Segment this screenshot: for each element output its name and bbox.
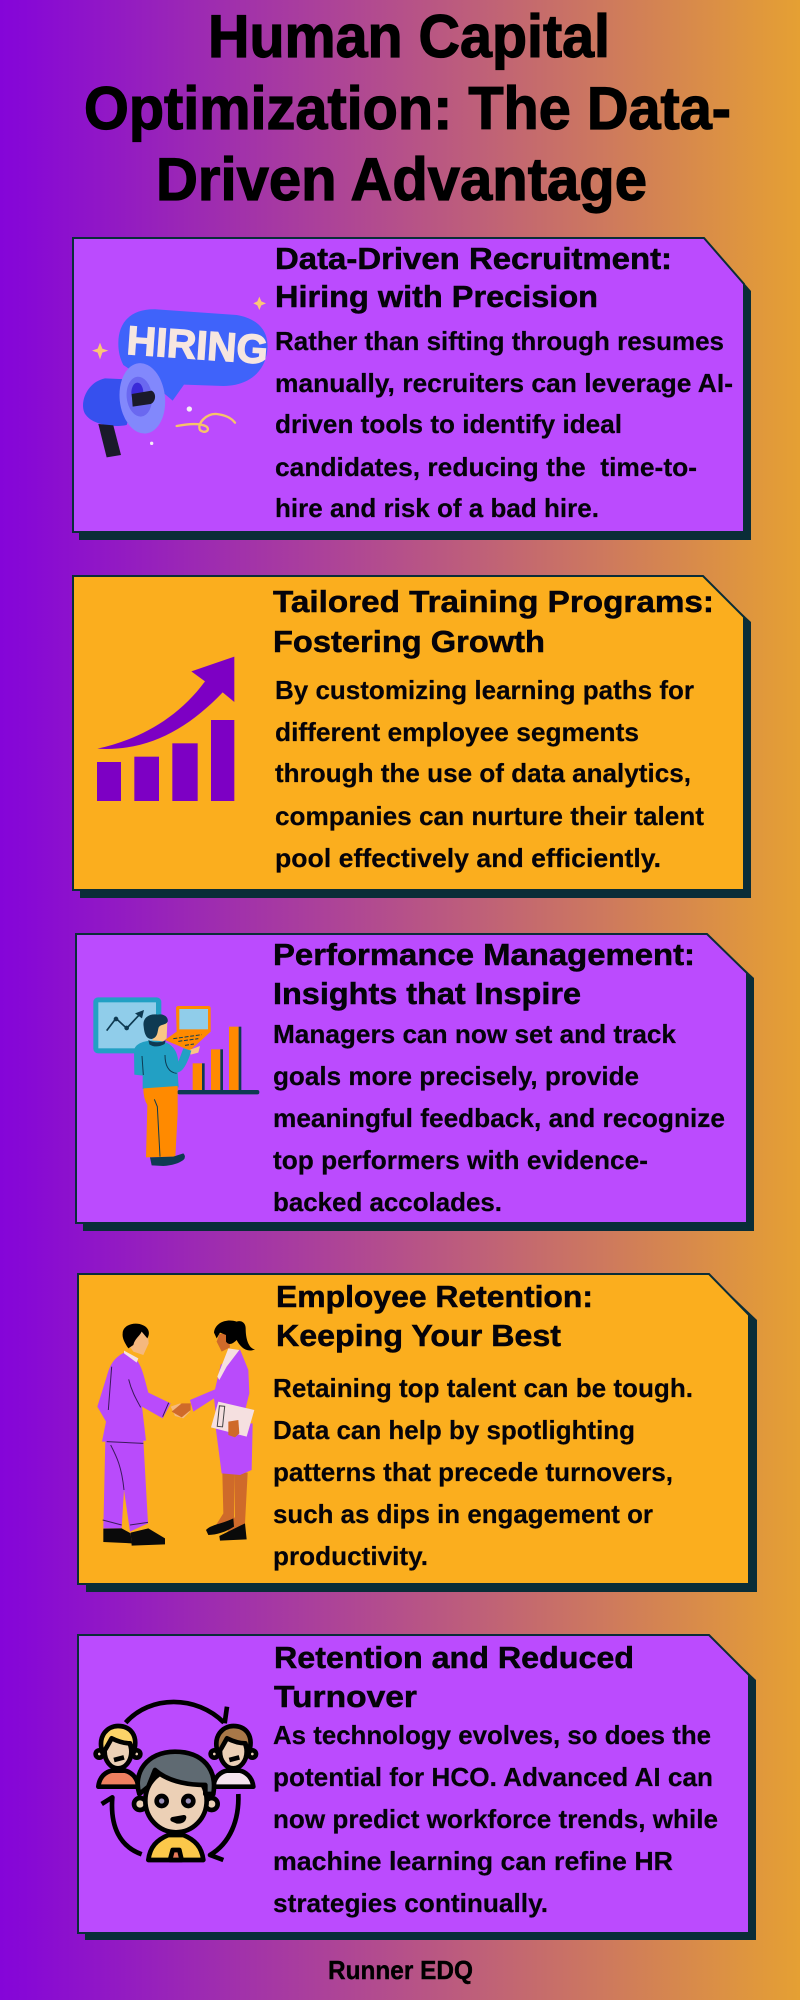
- heading: [275, 242, 672, 314]
- body text: potential for HCO. Advanced AI can: [273, 1762, 713, 1792]
- heading: Retention and Reduced: [274, 1641, 634, 1675]
- body text: hire and risk of a bad hire.: [275, 493, 599, 523]
- icon: team rotation: [96, 1702, 256, 1860]
- card 4 background: [78, 1274, 757, 1592]
- heading: [273, 938, 695, 1011]
- body text: such as dips in engagement or: [273, 1499, 653, 1529]
- heading: [276, 1280, 593, 1353]
- panel: employee retention: [78, 1274, 757, 1592]
- title: [84, 3, 731, 213]
- body text: By customizing learning paths for: [275, 675, 694, 705]
- heading: [273, 585, 714, 659]
- icon: analyst with laptop: [93, 997, 259, 1166]
- body text: [273, 1019, 725, 1217]
- body text: candidates, reducing the time-to-: [275, 452, 697, 482]
- heading: [274, 1641, 634, 1714]
- card 1 background: [73, 238, 751, 540]
- body text: As technology evolves, so does the: [273, 1720, 711, 1750]
- body text: patterns that precede turnovers,: [273, 1457, 673, 1487]
- panel: retention and reduced turnover: [78, 1635, 756, 1940]
- card 2 background: [73, 576, 751, 898]
- body text: [275, 326, 733, 523]
- body text: meaningful feedback, and recognize: [273, 1103, 725, 1133]
- heading: Employee Retention:: [276, 1280, 593, 1314]
- body text: [273, 1373, 693, 1571]
- body text: backed accolades.: [273, 1187, 502, 1217]
- body text: through the use of data analytics,: [275, 758, 691, 788]
- body text: now predict workforce trends, while: [273, 1804, 718, 1834]
- body text: [275, 675, 704, 873]
- icon: hiring megaphone: HIRING: [125, 317, 270, 373]
- body text: [273, 1720, 718, 1918]
- body text: Managers can now set and track: [273, 1019, 677, 1049]
- body text: machine learning can refine HR: [273, 1846, 673, 1876]
- icon: hiring megaphone: [83, 297, 270, 457]
- heading: Tailored Training Programs:: [273, 585, 714, 619]
- heading: Data-Driven Recruitment:: [275, 242, 672, 276]
- body text: goals more precisely, provide: [273, 1061, 639, 1091]
- body text: manually, recruiters can leverage AI-: [275, 368, 733, 398]
- panel: data-driven recruitment: [73, 238, 751, 540]
- body text: different employee segments: [275, 717, 639, 747]
- title: Optimization: The Data-: [84, 75, 731, 142]
- footer credit: Runner EDQ: [328, 1955, 473, 1985]
- body text: Rather than sifting through resumes: [275, 326, 724, 356]
- icon: handshake: [97, 1321, 255, 1546]
- title: Human Capital: [208, 3, 610, 70]
- heading: Keeping Your Best: [276, 1319, 561, 1353]
- panel: performance management: [76, 934, 754, 1231]
- body text: Data can help by spotlighting: [273, 1415, 635, 1445]
- body text: top performers with evidence-: [273, 1145, 648, 1175]
- panel: tailored training programs: [73, 576, 751, 898]
- icon: growth chart: [97, 657, 234, 801]
- body text: pool effectively and efficiently.: [275, 843, 661, 873]
- body text: productivity.: [273, 1541, 428, 1571]
- card 3 background: [76, 934, 754, 1231]
- body text: companies can nurture their talent: [275, 801, 704, 831]
- heading: Turnover: [274, 1680, 417, 1714]
- heading: Performance Management:: [273, 938, 695, 972]
- heading: Insights that Inspire: [273, 977, 581, 1011]
- body text: driven tools to identify ideal: [275, 409, 622, 439]
- body text: strategies continually.: [273, 1888, 548, 1918]
- heading: Hiring with Precision: [275, 280, 598, 314]
- title: Driven Advantage: [156, 146, 647, 213]
- body text: Retaining top talent can be tough.: [273, 1373, 693, 1403]
- heading: Fostering Growth: [273, 625, 545, 659]
- card 5 background: [78, 1635, 756, 1940]
